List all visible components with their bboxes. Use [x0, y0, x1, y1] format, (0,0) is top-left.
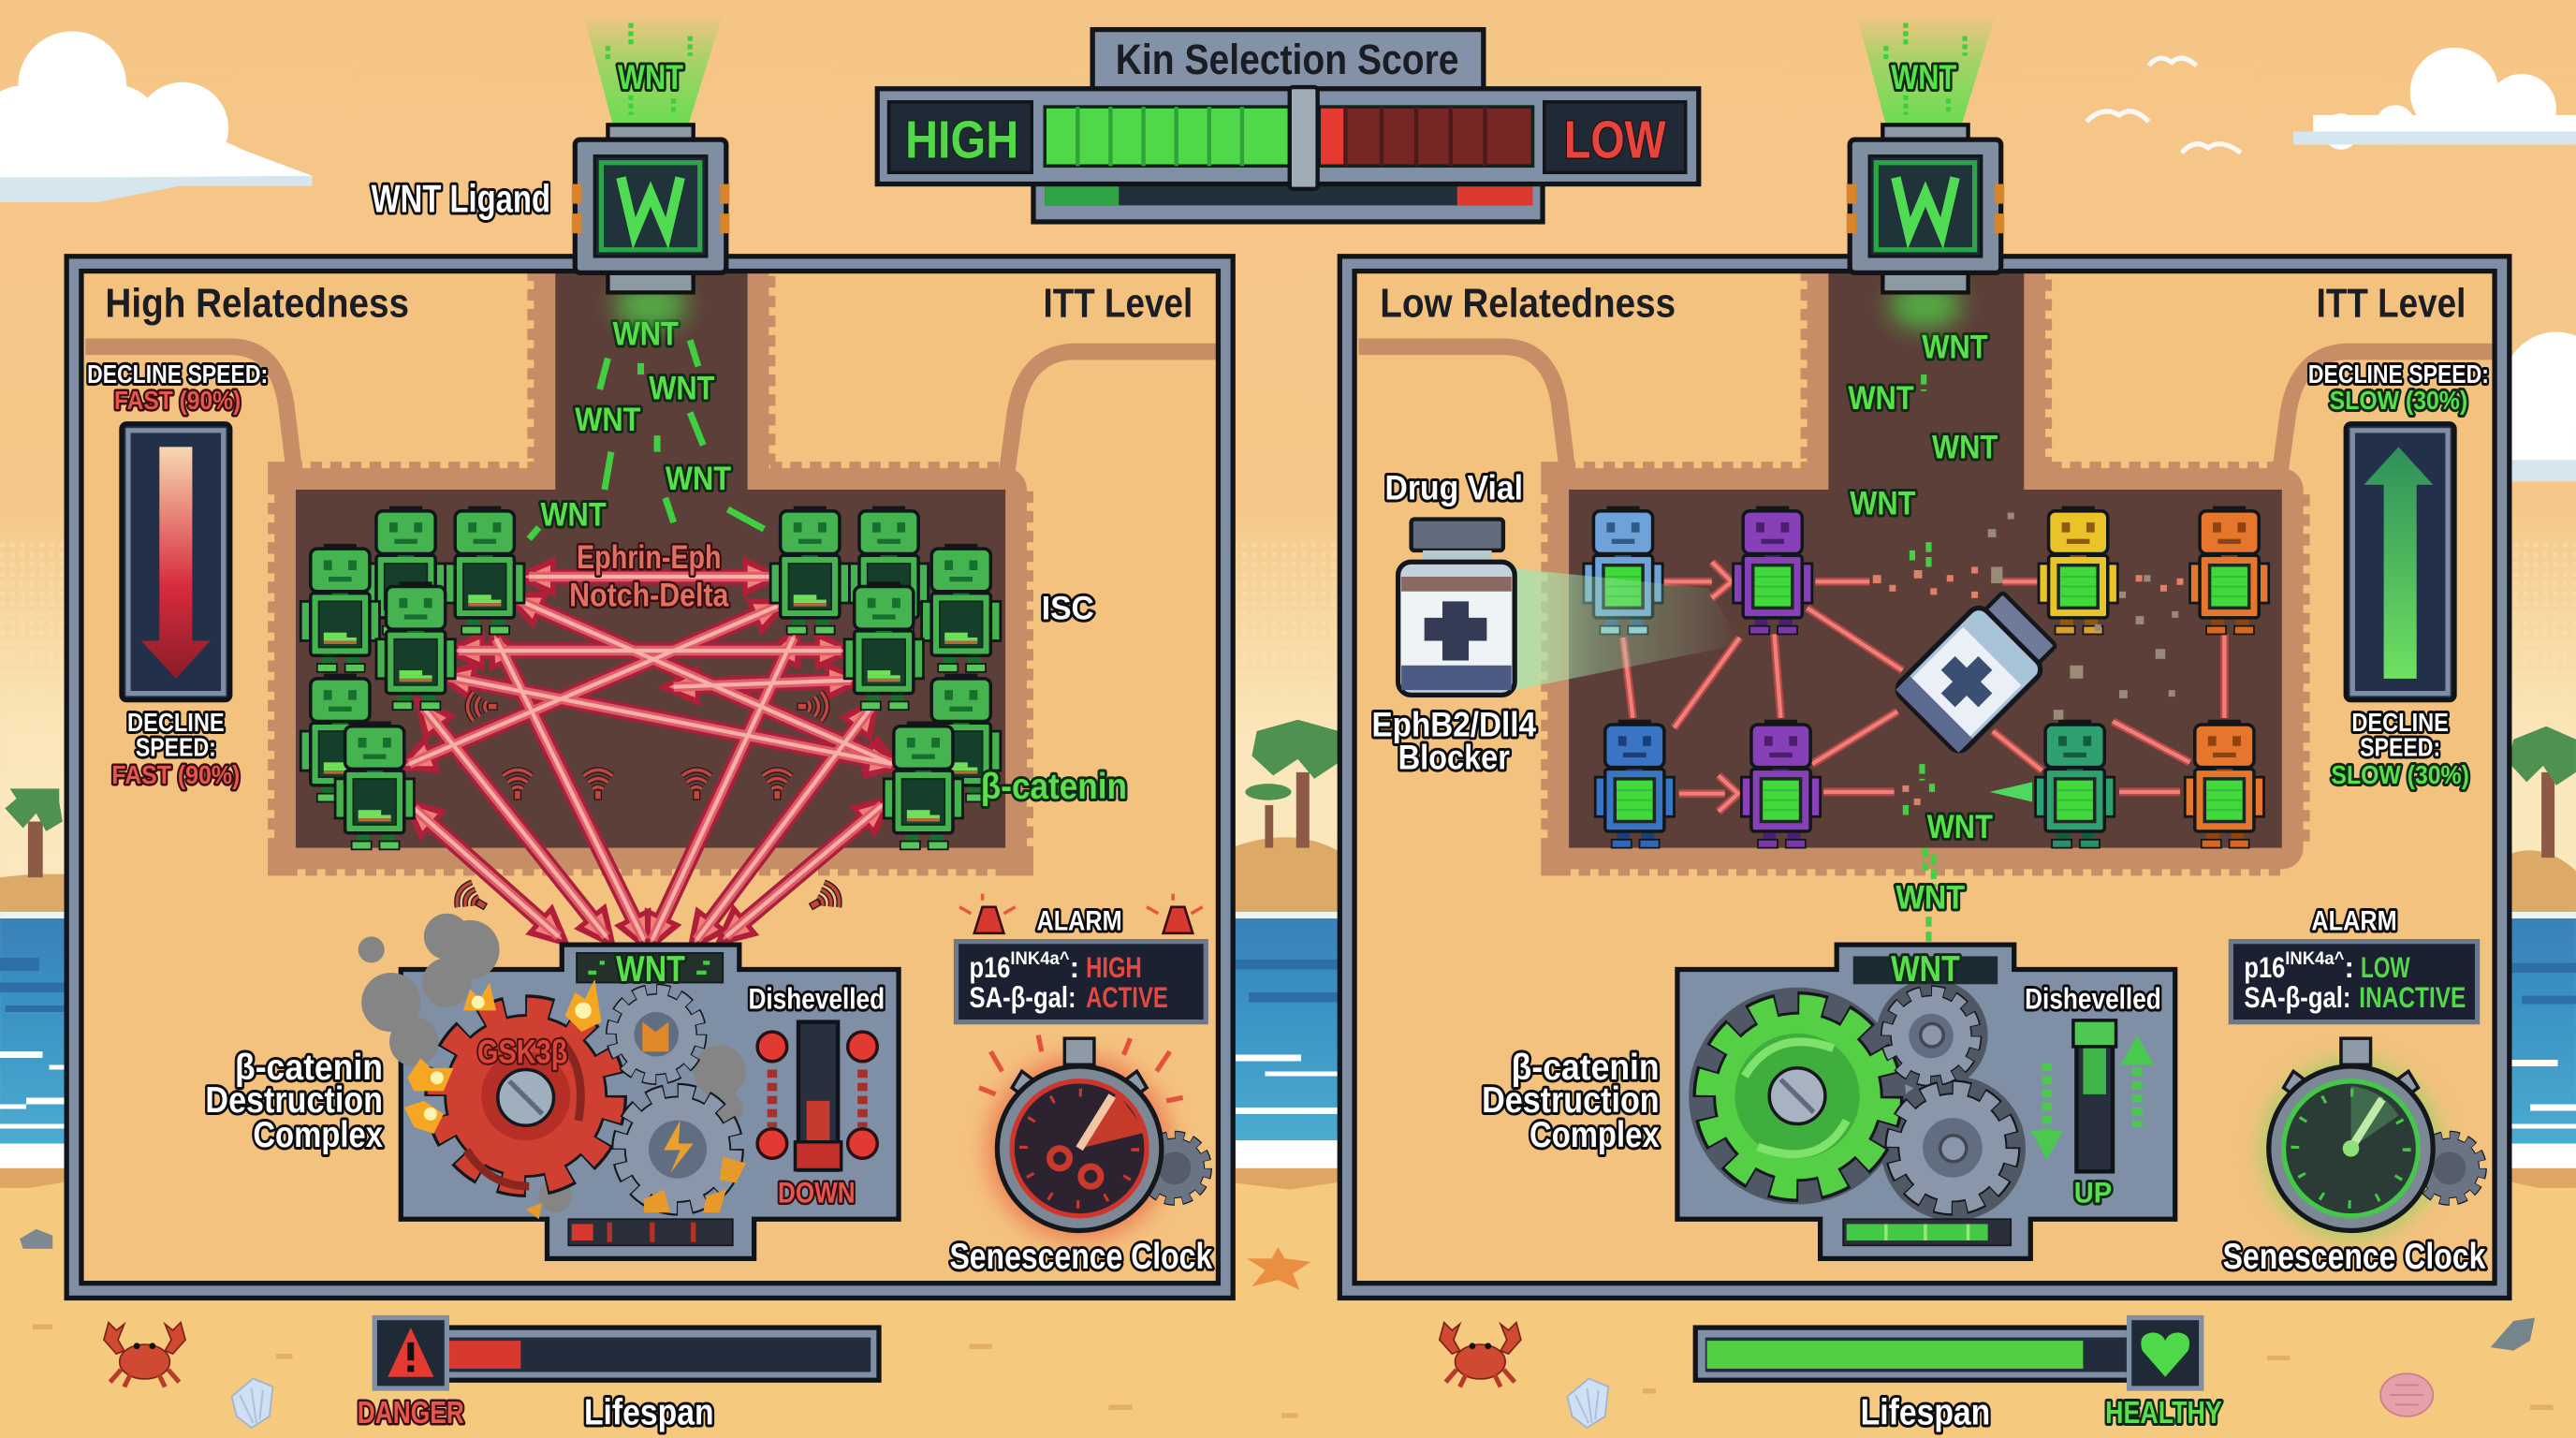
icon: crab right [1440, 1323, 1521, 1387]
label: ephb2/dll4 blocker: Blocker [1398, 738, 1510, 776]
panel background [1347, 263, 2502, 1290]
label: senescence clock: Senescence Clock [2223, 1237, 2486, 1277]
wnt labels [1848, 330, 2032, 953]
senescence clock, red [979, 1035, 1207, 1240]
alarm box: LOW [2361, 950, 2410, 984]
wnt screen [1853, 949, 1998, 990]
drug spray [1515, 568, 1741, 690]
alarm box: INACTIVE [2359, 980, 2466, 1014]
gauge: decline arrow down [122, 424, 230, 700]
colourful robots [1584, 506, 2269, 848]
crypt: dirt tunnel [85, 270, 1219, 848]
panel background [74, 263, 1225, 1290]
score title: Kin Selection Score [1116, 36, 1459, 83]
weak signal links [1623, 562, 2224, 812]
label: decline speed top: DECLINE SPEED: [2308, 360, 2489, 389]
panel frame [74, 264, 1225, 1291]
palm trees [5, 720, 2576, 877]
dishevelled lever [757, 1022, 877, 1170]
smoke [359, 914, 746, 1212]
label: wnt ligand: WNT Ligand [372, 176, 550, 220]
wnt screen: WNT [616, 949, 685, 990]
kin selection score gauge [877, 30, 1699, 222]
cloud: top left [0, 31, 313, 202]
panel: high relatedness [74, 263, 1225, 1291]
icon: crab left [104, 1323, 185, 1387]
label: decline speed bottom: DECLINE [2351, 708, 2449, 737]
red meter [1319, 107, 1532, 166]
label: beta-catenin: β-catenin [981, 767, 1127, 807]
destruction complex machine, damaged [359, 914, 899, 1258]
icon: shell right [1567, 1378, 1608, 1428]
wnt labels: WNT [1850, 485, 1916, 521]
panel frame [1347, 264, 2502, 1291]
icon: small rock [20, 1229, 52, 1249]
green stem cell robots, left group [300, 506, 524, 849]
gauge: decline arrow up [2346, 424, 2454, 700]
senescence clock, green [2262, 1038, 2481, 1238]
label: lifespan: Lifespan [1861, 1393, 1990, 1433]
wnt labels: WNT [1848, 380, 1914, 417]
label: down: DOWN [778, 1176, 856, 1210]
cloud: right edge [2504, 332, 2576, 481]
grey gears [1888, 992, 1975, 1079]
label: decline speed top: SLOW (30%) [2330, 386, 2467, 415]
icon: grey rock [2491, 1318, 2535, 1351]
label: ephrin-eph: Ephrin-Eph [577, 539, 722, 576]
icon: drug vial [1398, 520, 1515, 695]
wnt emitter right: WNT [1891, 58, 1957, 96]
label: lifespan: Lifespan [584, 1393, 714, 1433]
label: beta-catenin destruction complex: Complex [1530, 1115, 1660, 1155]
red status bar [568, 1219, 733, 1245]
wnt labels: WNT [1927, 809, 1993, 845]
wnt labels: WNT [1895, 880, 1966, 917]
low box: LOW [1564, 110, 1666, 169]
heading: high relatedness: High Relatedness [105, 281, 409, 327]
heading: itt level: ITT Level [2317, 281, 2466, 327]
label: beta-catenin destruction complex [1482, 1048, 1660, 1155]
label: dishevelled: Dishevelled [2025, 982, 2161, 1016]
wnt emitter left [572, 13, 729, 329]
wnt labels: WNT [1922, 330, 1988, 366]
label: dishevelled: Dishevelled [748, 982, 885, 1016]
lower track [1033, 174, 1543, 222]
label: decline speed bottom: FAST (90%) [111, 760, 240, 789]
label: beta-catenin destruction complex: Destruction [1482, 1080, 1660, 1121]
label: decline speed bottom [2331, 708, 2469, 789]
icon: starfish [1247, 1247, 1311, 1290]
seagulls [2086, 58, 2241, 153]
wnt labels in shaft [529, 316, 764, 539]
machine plate [401, 945, 899, 1258]
lifespan bar left [374, 1318, 879, 1388]
alarm box: p16 [2244, 950, 2285, 984]
green gear [1707, 1006, 1889, 1187]
label: decline speed bottom: DECLINE [127, 708, 225, 737]
wnt labels in shaft: WNT [575, 402, 641, 438]
destruction complex machine, healthy [1677, 945, 2175, 1258]
label: beta-catenin destruction complex: β-catenin [235, 1048, 383, 1088]
stress signal icons [452, 692, 844, 919]
wnt emitter right [1847, 13, 2004, 329]
label: drug vial: Drug Vial [1385, 469, 1523, 507]
wnt labels in shaft: WNT [666, 461, 732, 497]
label: decline speed top: FAST (90%) [114, 386, 241, 415]
dishevelled lever [2030, 1020, 2154, 1171]
lifespan bar right [1695, 1318, 2202, 1388]
alarm box: INK4a^ [2285, 949, 2344, 969]
alarm box: : [2344, 950, 2354, 984]
label: beta-catenin destruction complex: Destruction [205, 1080, 383, 1121]
high box: HIGH [905, 110, 1018, 169]
label: senescence clock: Senescence Clock [949, 1237, 1213, 1277]
gear shadow plates [1689, 979, 2026, 1221]
wnt labels in shaft: WNT [540, 497, 607, 534]
label: beta-catenin destruction complex: β-catenin [1512, 1048, 1660, 1088]
label: up: UP [2074, 1176, 2112, 1210]
alarm box: ALARM [1036, 905, 1122, 936]
label: isc: ISC [1042, 591, 1094, 627]
wnt screen: WNT [1891, 949, 1960, 990]
wnt emitter left: WNT [618, 58, 684, 96]
score tab [1092, 30, 1484, 92]
label: decline speed bottom: SLOW (30%) [2331, 760, 2469, 789]
label: decline speed bottom: SPEED: [2360, 732, 2440, 761]
label: beta-catenin destruction complex [205, 1048, 383, 1155]
wnt labels: WNT [1932, 430, 1998, 466]
alarm box: : [1070, 950, 1079, 984]
heading: low relatedness: Low Relatedness [1380, 281, 1676, 327]
main bar [877, 89, 1699, 184]
alarm box: HIGH [1086, 950, 1142, 984]
panel: low relatedness [1347, 263, 2502, 1291]
label: decline speed top [87, 360, 268, 415]
label: decline speed top [2308, 360, 2489, 415]
red link fragments [1873, 566, 2183, 805]
green status bar [1843, 1219, 2011, 1245]
label: beta-catenin destruction complex: Complex [253, 1115, 383, 1155]
alarm box: ACTIVE [1086, 980, 1168, 1014]
alarm box: SA-β-gal: [970, 980, 1076, 1014]
grey damaged gears [613, 990, 700, 1078]
alarm box: p16 [970, 950, 1010, 984]
crypt: dirt tunnel [1358, 270, 2492, 848]
icon: shell left [232, 1378, 272, 1428]
cloud: top right [2293, 48, 2576, 150]
label: ephb2/dll4 blocker [1372, 705, 1536, 776]
green stem cell robots, right group [770, 506, 1001, 849]
machine plate [1677, 945, 2175, 1258]
flames [404, 979, 746, 1219]
label: decline speed bottom: SPEED: [136, 732, 216, 761]
icon: pink shell [2380, 1373, 2433, 1416]
alarm box: INK4a^ [1010, 949, 1070, 969]
label: decline speed bottom [111, 708, 240, 789]
alarm box: ALARM [2311, 905, 2397, 936]
wnt screen [577, 949, 723, 990]
heading: itt level: ITT Level [1044, 281, 1193, 327]
label: ephb2/dll4 blocker: EphB2/Dll4 [1372, 705, 1536, 743]
destruction complex machine, damaged: GSK3β [477, 1034, 567, 1071]
label: danger: DANGER [358, 1396, 464, 1431]
label: decline speed top: DECLINE SPEED: [87, 360, 268, 389]
slider knob [1290, 87, 1318, 189]
alarm box [2231, 905, 2478, 1022]
label: healthy: HEALTHY [2105, 1396, 2222, 1431]
red broken gear [439, 1008, 613, 1183]
wnt labels in shaft: WNT [613, 316, 679, 353]
signal arrows [409, 577, 892, 940]
broken vial and debris [1893, 513, 2178, 756]
alarm box [956, 894, 1206, 1022]
alarm box: SA-β-gal: [2244, 980, 2351, 1014]
label: notch-delta: Notch-Delta [569, 578, 729, 614]
green meter [1045, 107, 1290, 166]
wnt labels in shaft: WNT [649, 370, 715, 406]
